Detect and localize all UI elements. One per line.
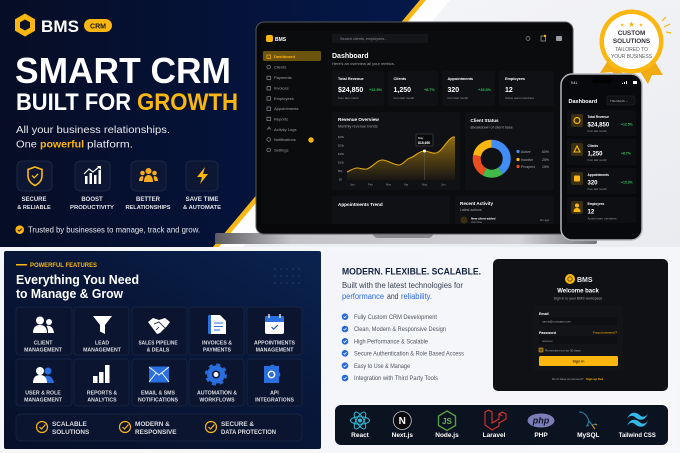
login card: Password (539, 331, 556, 335)
phone (561, 74, 642, 240)
tech: mysql (577, 412, 600, 439)
benefit: save time: SAVE TIME (186, 197, 218, 203)
assurance bar: SOLUTIONS (52, 429, 90, 436)
award badge: ★ (639, 22, 644, 28)
panel: recent activity (455, 196, 554, 224)
laptop heading (332, 53, 395, 66)
checklist: Integration with Third Party Tools (354, 376, 438, 382)
feature: user and role: MANAGEMENT (24, 398, 63, 404)
phone stat: total revenue: Total Revenue (588, 115, 609, 119)
area chart: revenue overview: $25k (338, 135, 345, 139)
section heading: Everything You Need (16, 272, 139, 287)
laptop heading: Dashboard (332, 53, 369, 60)
tagline: One (16, 138, 37, 150)
phone stat: clients: Clients (588, 144, 598, 148)
stat card: employees: Employees (505, 77, 525, 81)
benefit: productivity: BOOST (81, 197, 103, 203)
stat card: total revenue: Total Revenue (338, 77, 364, 81)
checklist: High Performance & Scalable (354, 339, 429, 345)
laptop sidebar: Invoices (274, 86, 289, 90)
area chart: revenue overview: $0 (339, 178, 343, 182)
login card: Don't have an account? (552, 377, 584, 381)
donut chart: client status: Active (521, 150, 531, 154)
feature: user and role (16, 359, 72, 406)
feature: reports: ANALYTICS (87, 398, 117, 404)
tech: react (350, 410, 370, 439)
tech: node.js: JS (442, 417, 453, 426)
panel: appointments trend (332, 196, 450, 224)
login card: Forgot password? (593, 330, 617, 334)
title (15, 50, 238, 116)
feature: sales pipeline: & DEALS (147, 348, 170, 354)
laptop sidebar: Settings (274, 148, 288, 152)
area chart: revenue overview (332, 112, 460, 190)
phone: 9:41 (571, 81, 577, 85)
phone stat: employees (567, 197, 636, 223)
logo: CRM (90, 23, 106, 30)
phone stat: appointments: +15.3% (621, 180, 633, 184)
login card: BMS (577, 277, 593, 284)
feature: reports: REPORTS & (87, 390, 117, 396)
award badge: YOUR BUSINESS (611, 54, 653, 60)
stat card: total revenue: from last month (338, 96, 359, 100)
area chart: revenue overview: Jan (350, 182, 355, 186)
donut chart: client status: Breakdown of client base (470, 126, 513, 130)
section heading (16, 262, 139, 301)
logo: BMS (41, 18, 79, 36)
tagline (16, 124, 170, 150)
laptop sidebar: Clients (274, 64, 286, 70)
phone: This Month ⌄ (610, 99, 628, 103)
tech stack bar (335, 405, 668, 445)
award badge: TAILORED TO (615, 47, 648, 53)
assurance bar: MODERN & (135, 421, 170, 428)
assurance bar: SCALABLE (52, 421, 88, 428)
benefit: relationships (126, 161, 171, 211)
tech: next.js: Next.js (392, 432, 413, 439)
login card: Welcome back (557, 288, 599, 294)
login card: Email (539, 312, 549, 316)
feature: automation: AUTOMATION & (197, 390, 237, 396)
feature: lead management: MANAGEMENT (83, 348, 122, 354)
stat card: appointments: Appointments (448, 77, 473, 81)
phone stat: appointments (567, 168, 636, 194)
feature: user and role: USER & ROLE (25, 390, 61, 396)
stat card: clients: 1,250 (394, 87, 411, 94)
checklist (342, 313, 464, 382)
tech: php (528, 414, 554, 439)
feature: email and sms: NOTIFICATIONS (138, 398, 179, 404)
phone stat: employees: Active team members (588, 216, 617, 220)
tech: laravel: Laravel (483, 432, 506, 439)
area chart: revenue overview: Revenue Overview (338, 117, 379, 122)
donut chart: client status: Prospect (521, 165, 535, 169)
feature: sales pipeline (132, 307, 187, 355)
donut chart: client status: 15% (542, 165, 549, 169)
tagline: platform. (87, 138, 133, 150)
tech: laravel (483, 410, 506, 439)
award badge: ★ (620, 22, 625, 28)
tech: next.js (392, 412, 413, 439)
laptop search and toolbar (332, 34, 562, 43)
section heading: to Manage & Grow (16, 286, 124, 301)
heading: modern flexible scalable: reliability. (401, 292, 432, 301)
feature: appointments: APPOINTMENTS (254, 340, 296, 346)
panel: hero (0, 0, 680, 247)
login card (493, 259, 668, 391)
area chart: revenue overview: Jun (441, 182, 446, 186)
stat card: employees (499, 71, 554, 106)
area chart: revenue overview: $20k (338, 144, 345, 148)
area chart: revenue overview: Feb (368, 182, 373, 186)
laptop sidebar: BMS (275, 37, 287, 43)
panel: technology (325, 251, 678, 451)
phone stat: appointments: Appointments (588, 173, 609, 177)
laptop (215, 22, 597, 244)
assurance bar: RESPONSIVE (135, 429, 177, 436)
login card: Sign in to your BMS workspace (554, 296, 602, 300)
panel: recent activity: Recent Activity (460, 201, 493, 206)
logo (15, 14, 112, 36)
area chart: revenue overview: $15k (338, 152, 345, 156)
title: GROWTH (137, 89, 238, 116)
award badge: CUSTOM (618, 30, 645, 37)
stat card: total revenue: $24,850 (338, 87, 363, 94)
checklist: Easy to Use & Manage (354, 364, 411, 370)
heading: modern flexible scalable: performance (342, 292, 385, 301)
stat card: total revenue (332, 71, 384, 106)
heading: modern flexible scalable: MODERN. FLEXIBLE. SCALABLE. (342, 266, 481, 278)
heading: modern flexible scalable: Built with the latest technologies for (342, 281, 463, 290)
stat card: appointments: +15.3% (478, 88, 492, 92)
tech: react: React (351, 432, 370, 439)
feature: invoices: PAYMENTS (203, 348, 232, 354)
feature: invoices (189, 307, 244, 355)
panel: powerful features (4, 251, 321, 449)
stat card: employees: Active team members (505, 96, 535, 100)
benefit: productivity (70, 161, 114, 211)
benefit: secure (17, 161, 52, 211)
stat card: employees: 12 (505, 87, 513, 94)
phone stat: employees: 12 (588, 210, 595, 216)
stat card: appointments: 320 (448, 87, 459, 94)
benefit: secure: SECURE (21, 197, 47, 203)
phone stat: total revenue: +12.5% (621, 122, 633, 126)
panel: appointments trend: Appointments Trend (338, 202, 383, 207)
assurance bar: SECURE & (221, 421, 254, 428)
login card: name@company.com (542, 320, 572, 324)
panel: recent activity: New client added (471, 216, 496, 220)
feature: appointments (247, 307, 302, 355)
login card: Sign up free (586, 377, 604, 381)
trust line: Trusted by businesses to manage, track and grow. (28, 226, 200, 234)
checklist: Clean, Modern & Responsive Design (354, 327, 446, 333)
phone stat: clients (567, 139, 636, 165)
area chart: revenue overview: $18,650 (418, 141, 430, 145)
stat card: clients (388, 71, 438, 106)
laptop sidebar: Employees (274, 96, 294, 101)
benefit: relationships: BETTER (136, 197, 161, 203)
laptop sidebar: Payments (274, 75, 292, 80)
title: SMART CRM (15, 50, 231, 91)
area chart: revenue overview: Apr (404, 182, 408, 186)
tech: mysql: MySQL (577, 432, 600, 439)
area chart: revenue overview: $5k (338, 169, 343, 173)
benefit: relationships: RELATIONSHIPS (126, 205, 171, 211)
stat card: appointments (442, 71, 495, 106)
phone stat: total revenue: from last month (588, 129, 607, 133)
area chart: revenue overview: May (418, 136, 424, 140)
award badge (600, 10, 671, 84)
feature: sales pipeline: SALES PIPELINE (138, 340, 178, 346)
assurance bar: DATA PROTECTION (221, 429, 276, 436)
login card: Remember me for 30 days (545, 348, 581, 352)
feature: client management: MANAGEMENT (24, 348, 63, 354)
laptop sidebar (263, 35, 321, 152)
laptop sidebar: Activity Logs (274, 127, 296, 132)
tech: tailwind css (619, 413, 656, 439)
stat card: clients: from last month (394, 96, 415, 100)
feature: lead management (74, 307, 129, 355)
phone stat: clients: 1,250 (588, 152, 603, 158)
laptop sidebar: Notifications (274, 137, 296, 142)
area chart: revenue overview: Mar (386, 182, 391, 186)
laptop sidebar: Reports (274, 116, 288, 122)
feature: client management (16, 307, 72, 355)
donut chart: client status (465, 112, 554, 190)
feature: client management: CLIENT (34, 340, 53, 346)
donut chart: client status: Inactive (521, 158, 533, 162)
phone: Dashboard (568, 99, 597, 105)
panel: recent activity: Latest actions (460, 208, 482, 212)
feature: automation (189, 359, 244, 406)
stat card: appointments: from last month (448, 96, 469, 100)
laptop sidebar: Dashboard (274, 54, 295, 59)
stat card: clients: +8.7% (424, 88, 435, 92)
laptop sidebar: Appointments (274, 106, 298, 111)
benefit: save time (183, 161, 221, 211)
panel: recent activity: 2m ago (540, 218, 550, 222)
tech: node.js: Node.js (435, 432, 459, 439)
area chart: revenue overview: $10k (338, 160, 345, 164)
heading: modern flexible scalable: and (387, 292, 398, 301)
checklist: Fully Custom CRM Development (354, 315, 437, 321)
area chart: revenue overview: Monthly revenue trends (338, 124, 378, 128)
panel: recent activity: John Doe (471, 220, 483, 224)
phone stat: clients: +8.7% (621, 152, 631, 156)
feature: email and sms (132, 359, 187, 406)
laptop heading: Here's an overview all your metrics. (332, 61, 395, 66)
area chart: revenue overview: May (422, 182, 428, 186)
title: BUILT FOR (16, 89, 131, 116)
phone stat: total revenue: $24,850 (588, 122, 610, 128)
donut chart: client status: 60% (542, 150, 549, 154)
feature: api: INTEGRATIONS (255, 398, 294, 404)
tagline: powerful (40, 138, 84, 150)
benefit: secure: & RELIABLE (17, 205, 51, 211)
login card: Sign in (573, 360, 584, 364)
feature: api (247, 359, 302, 406)
award badge: SOLUTIONS (613, 38, 651, 45)
phone stat: appointments: from last month (588, 187, 607, 191)
phone stat: employees: Employees (588, 202, 605, 206)
benefit: productivity: PRODUCTIVITY (70, 205, 114, 211)
stat card: clients: Clients (394, 77, 406, 81)
checklist: Secure Authentication & Role Based Access (354, 351, 464, 357)
assurance bar (16, 414, 302, 441)
tech: node.js (435, 411, 459, 439)
tagline: All your business relationships. (16, 124, 170, 136)
phone stat: appointments: 320 (588, 180, 598, 186)
donut chart: client status: 25% (542, 158, 549, 162)
benefit: save time: & AUTOMATE (183, 205, 221, 211)
tech: tailwind css: Tailwind CSS (619, 432, 656, 439)
phone stat: total revenue (567, 110, 636, 136)
tech: php: php (532, 416, 550, 426)
stat card: total revenue: +12.5% (369, 88, 383, 92)
tech: next.js: N (399, 416, 406, 427)
section heading: POWERFUL FEATURES (30, 262, 98, 269)
feature: appointments: MANAGEMENT (256, 348, 294, 354)
donut chart: client status: Client Status (470, 118, 499, 123)
feature: api: API (270, 390, 279, 396)
tech: php: PHP (534, 432, 548, 439)
feature: invoices: INVOICES & (202, 340, 232, 346)
phone stat: clients: from last month (588, 158, 607, 162)
heading: modern flexible scalable (342, 266, 481, 301)
feature: reports (74, 359, 129, 406)
login card: •••••••••• (542, 339, 553, 343)
feature: email and sms: EMAIL & SMS (141, 390, 175, 396)
feature: automation: WORKFLOWS (199, 398, 235, 404)
feature: lead management: LEAD (95, 340, 109, 346)
laptop search and toolbar: Search clients, employees... (340, 37, 387, 41)
award badge: ★ (628, 20, 635, 29)
